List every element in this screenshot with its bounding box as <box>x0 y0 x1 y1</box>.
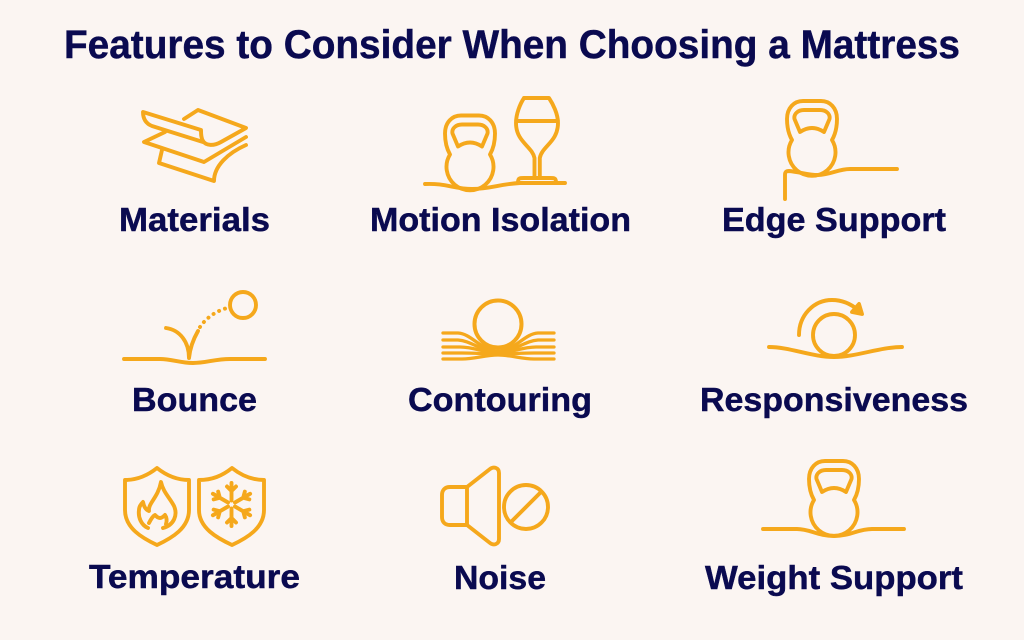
panel: weight support <box>705 461 963 596</box>
label: noise: Noise <box>454 559 546 596</box>
icon: bouncing ball <box>124 292 265 363</box>
label: materials: Materials <box>119 201 270 238</box>
label: responsiveness: Responsiveness <box>700 381 968 418</box>
icon: kettlebell and wine glass on mattress <box>425 98 565 190</box>
label: edge support: Edge Support <box>722 201 946 238</box>
label: temperature: Temperature <box>89 558 300 595</box>
icon: snowflake shield <box>199 468 264 545</box>
title: Features to Consider When Choosing a Mattress <box>64 23 960 67</box>
icon: flame shield <box>125 468 189 545</box>
panel: temperature <box>89 468 300 595</box>
panel: contouring <box>408 300 592 418</box>
label: weight support: Weight Support <box>705 559 963 596</box>
panel: bounce <box>124 292 265 418</box>
label: bounce: Bounce <box>132 381 257 418</box>
icon: stacked material sheets <box>143 110 246 181</box>
panel: edge support <box>722 101 946 238</box>
panel: noise <box>442 468 548 596</box>
icon: ball with rotation arrow <box>769 300 902 357</box>
icon: kettlebell on mattress edge <box>785 101 897 199</box>
panel: motion isolation <box>370 98 631 238</box>
icon: muted speaker <box>442 468 548 544</box>
icon: ball sinking into contouring layers <box>443 300 554 359</box>
panel: responsiveness <box>700 300 968 418</box>
icon: kettlebell on mattress <box>763 461 904 536</box>
label: motion isolation: Motion Isolation <box>370 201 631 238</box>
panel: materials <box>119 110 270 238</box>
label: contouring: Contouring <box>408 381 592 418</box>
